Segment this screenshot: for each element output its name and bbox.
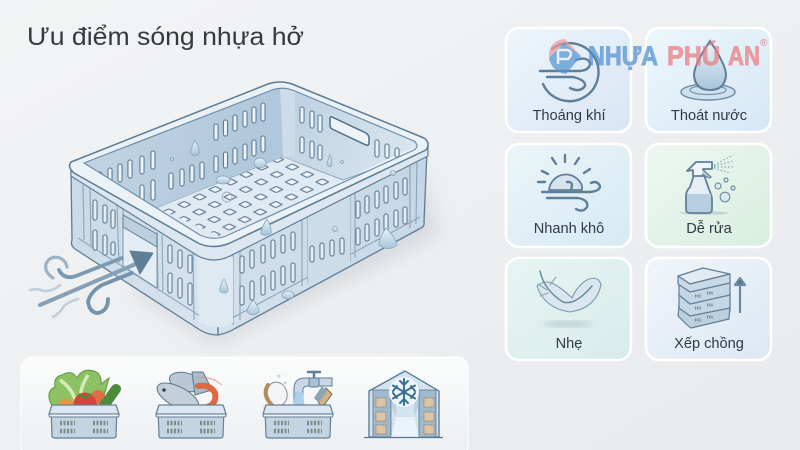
crate floor with drainage holes [157, 156, 371, 238]
corner post highlight [197, 255, 233, 327]
label: Nhẹ [556, 336, 582, 352]
interior slots [100, 105, 397, 200]
airflow arrow [30, 251, 153, 317]
panel: feature cards [506, 28, 771, 360]
panel: use cases [21, 357, 468, 450]
icon: sun and wind [538, 155, 600, 211]
icon: washing crate under tap [263, 372, 333, 438]
right face centre panel [308, 194, 350, 284]
title: Ưu điểm sóng nhựa hở [27, 23, 304, 51]
interior back-left wall [86, 89, 283, 208]
icon: wind circle [540, 43, 598, 101]
label: Thoát nước [671, 108, 747, 124]
interior corner highlight [280, 87, 295, 157]
icon: water drop [681, 41, 735, 100]
card: Xếp chồng [646, 258, 771, 360]
crate left face [71, 170, 218, 335]
illustration: open plastic crate with airflow [30, 70, 440, 345]
centre wind line [40, 263, 138, 305]
icon: seafood in crate [153, 369, 226, 438]
icon: spray bottle [680, 155, 735, 215]
label: Thoáng khí [532, 108, 606, 124]
icon: feather [537, 271, 601, 327]
brand name: blue: NHỰA [588, 41, 658, 71]
card: Dễ rửa [646, 144, 771, 247]
interior back-right wall [284, 92, 416, 180]
crate right face [218, 150, 427, 335]
brand name: red Phú: PHÚ [667, 40, 720, 71]
upper wind line with curl [59, 258, 122, 277]
arrow head [130, 251, 153, 274]
icon: cold storage warehouse [364, 371, 443, 438]
rim inner edge [84, 88, 417, 238]
registered mark: ® [760, 38, 768, 49]
back curl [46, 257, 67, 278]
wisps [30, 285, 60, 291]
lower wind line with hook [88, 273, 132, 313]
left face handle opening [123, 215, 157, 247]
crate interior [86, 89, 416, 238]
label: Dễ rửa [686, 220, 733, 237]
icon: vegetables in crate [49, 370, 119, 438]
watermark: Nhựa Phú An logo [549, 38, 768, 74]
left face handle panel [123, 222, 157, 288]
card: Nhanh khô [506, 144, 631, 247]
side handle [330, 117, 369, 145]
lower rim band [71, 145, 428, 260]
logo mark [549, 39, 581, 74]
icon: up arrow [735, 278, 745, 313]
icon: stacked crates [678, 268, 730, 328]
top rim [70, 82, 428, 246]
card: Nhẹ [506, 258, 631, 360]
card: Thoát nước [646, 28, 771, 132]
crate shadow [130, 170, 440, 345]
card: Thoáng khí [506, 28, 631, 132]
water droplets [170, 140, 397, 315]
label: Xếp chồng [674, 336, 744, 352]
crate base flange and ribs [78, 157, 420, 325]
crate outer slots [95, 180, 405, 303]
label: Nhanh khô [534, 221, 604, 237]
brand name: red An: AN [728, 41, 760, 71]
